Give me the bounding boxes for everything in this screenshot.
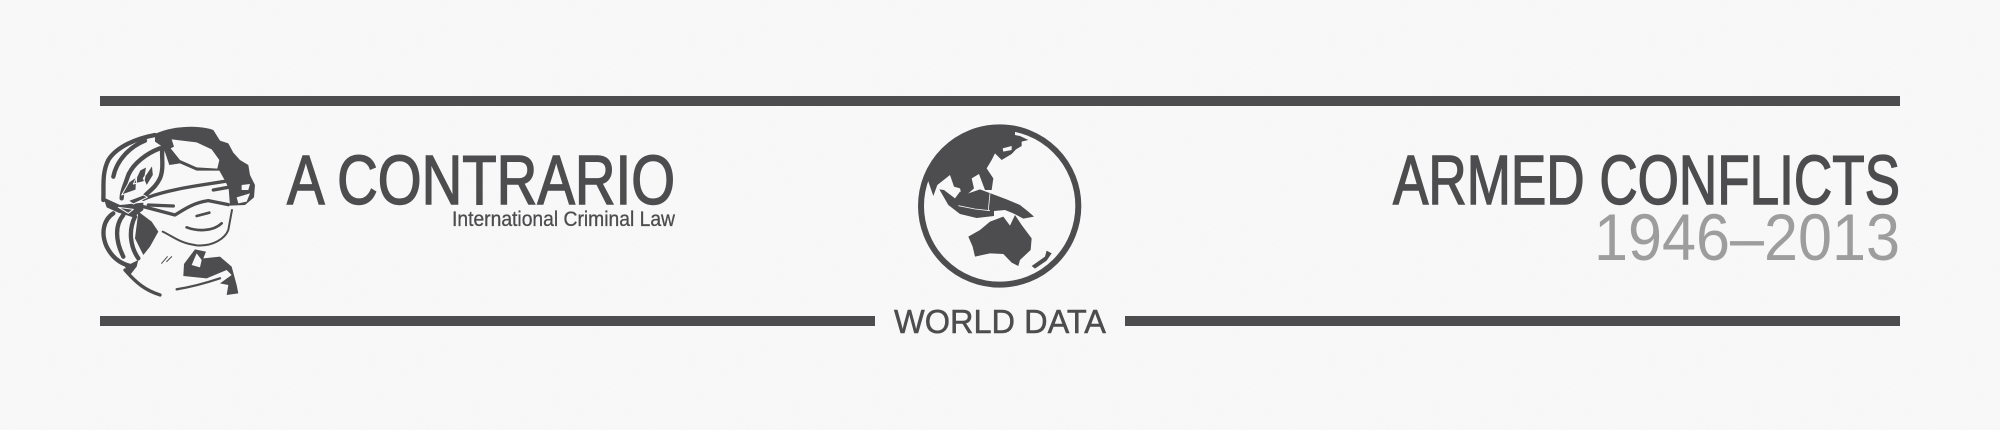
globe ring [921, 127, 1078, 285]
icon: globe [921, 127, 1078, 285]
Australia [968, 215, 1032, 266]
Indonesia and New Guinea [939, 189, 1034, 219]
label: WORLD DATA: WORLD DATA [894, 303, 1106, 340]
island dividers [958, 193, 990, 211]
facial features [163, 210, 232, 245]
icon: blindfolded Lady Justice [103, 127, 255, 295]
bottom rule right [1125, 316, 1900, 326]
top rule [100, 96, 1900, 106]
hair and laurel [103, 135, 163, 295]
Asia [927, 127, 1028, 196]
date range: 1946–2013: 1946–2013 [1594, 200, 1900, 274]
title: A CONTRARIO: A CONTRARIO [287, 141, 675, 219]
blindfold [143, 181, 228, 215]
subtitle: International Criminal Law: International Criminal Law [452, 208, 676, 231]
bottom rule left [100, 316, 875, 326]
neck and shoulder [183, 249, 238, 295]
New Zealand [1032, 251, 1052, 269]
